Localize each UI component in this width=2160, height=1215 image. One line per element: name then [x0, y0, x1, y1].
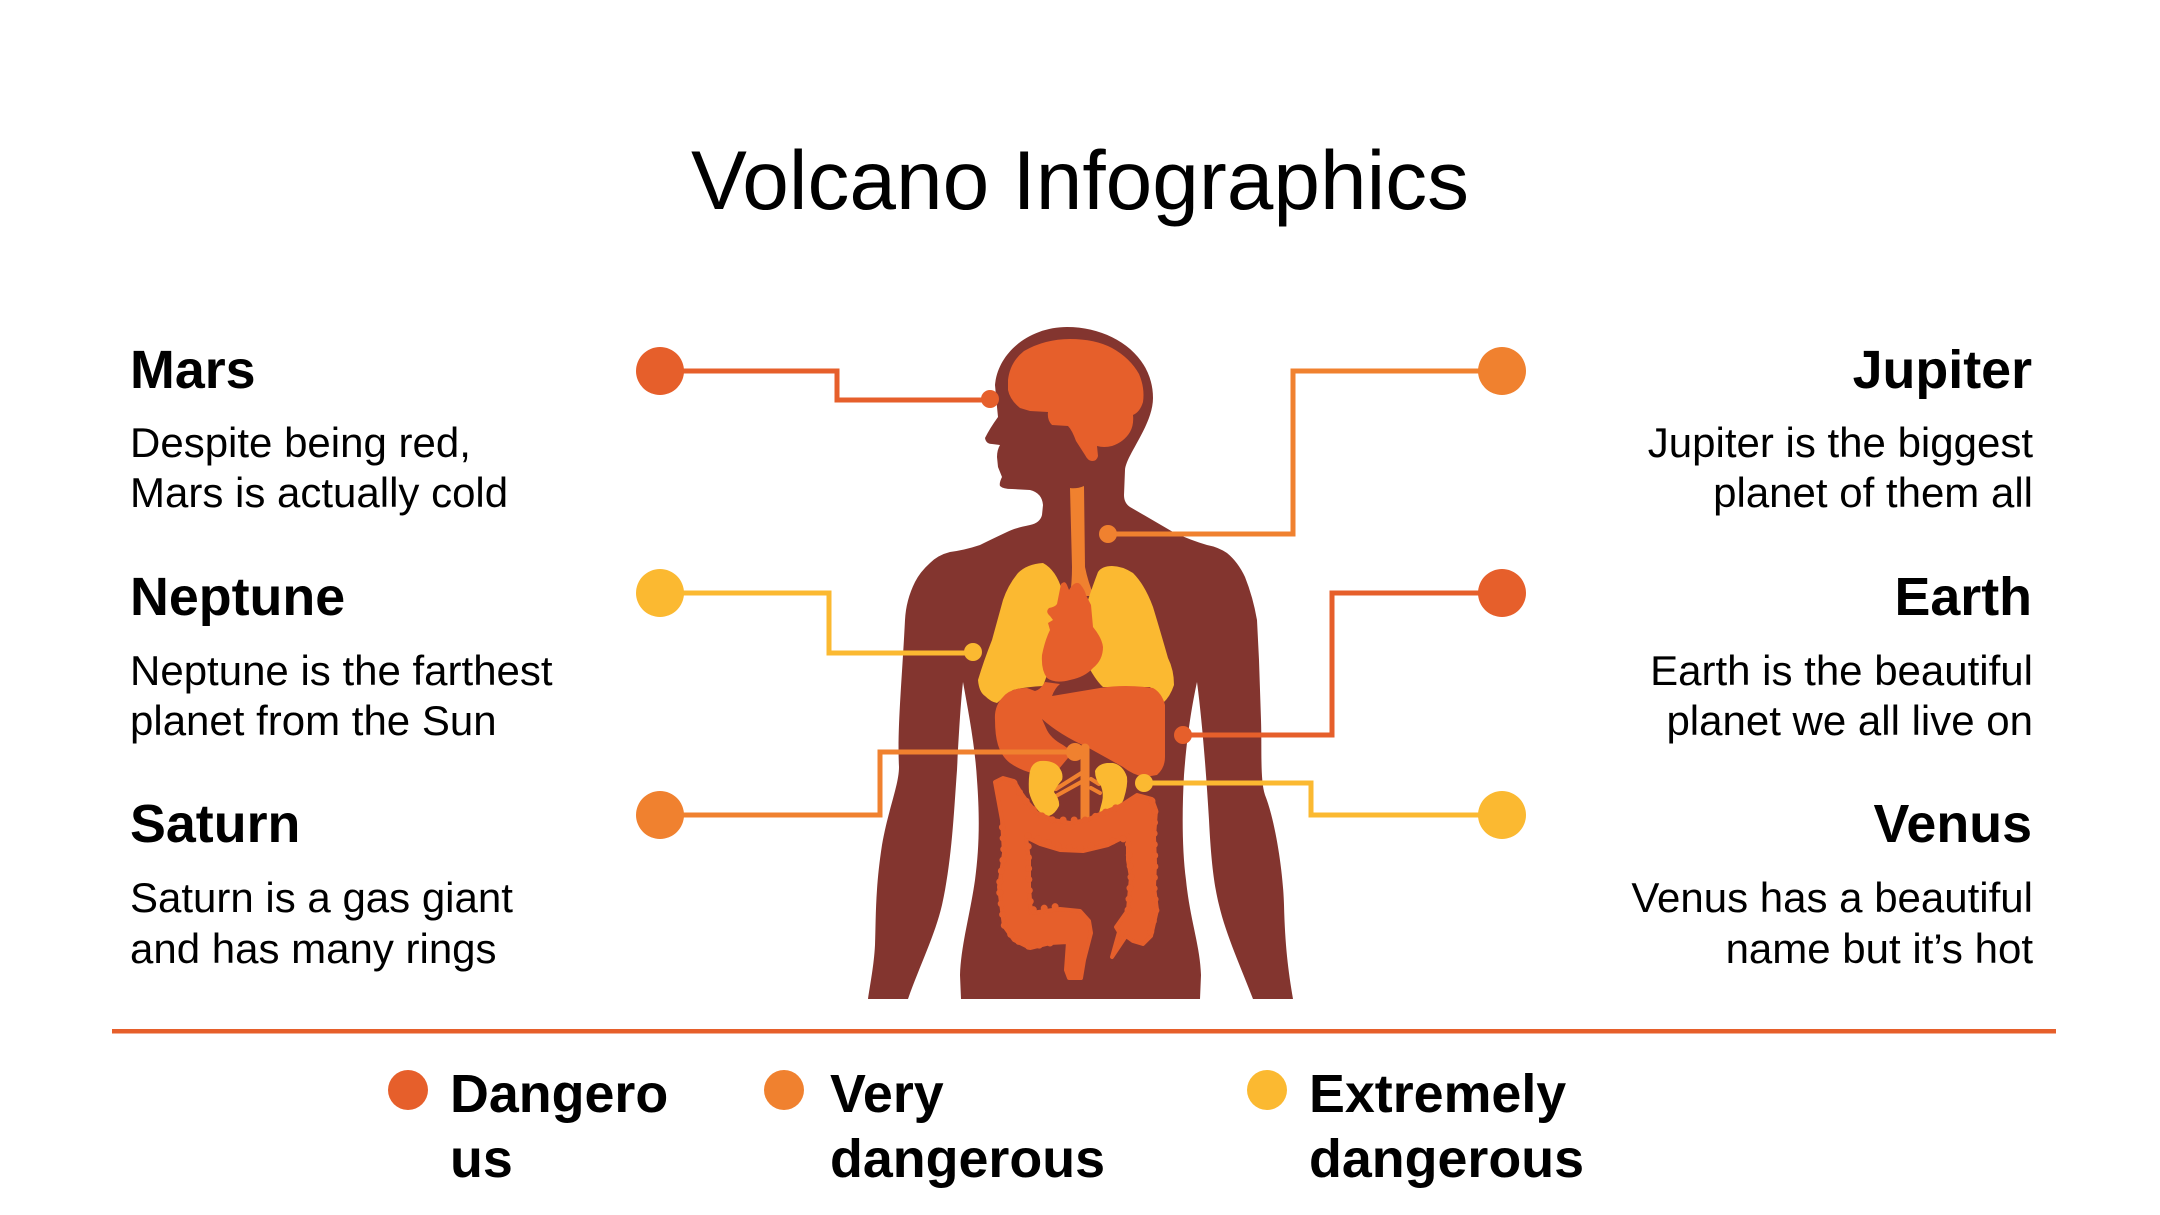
legend: Dangerous	[388, 1064, 668, 1189]
text block: Neptune: Neptune is the farthest	[130, 647, 553, 694]
connector: Jupiter	[1099, 347, 1526, 543]
legend: Very dangerous: Very	[830, 1064, 944, 1124]
organ: left kidney	[1029, 761, 1062, 816]
organ: trachea	[1070, 486, 1094, 596]
text block: Jupiter	[1648, 340, 2033, 516]
text block: Jupiter: planet of them all	[1713, 469, 2033, 516]
title: Volcano Infographics	[691, 133, 1469, 227]
text block: Saturn: and has many rings	[130, 925, 497, 972]
text block: Venus: Venus	[1874, 794, 2032, 854]
text block: Earth: planet we all live on	[1666, 697, 2033, 744]
text block: Jupiter: Jupiter is the biggest	[1648, 419, 2033, 466]
text block: Earth	[1650, 567, 2033, 744]
divider line	[112, 1029, 2056, 1034]
organ: right kidney	[1095, 763, 1127, 813]
connector: Mars	[636, 347, 999, 408]
connector: Venus	[1135, 774, 1526, 839]
text block: Mars: Mars is actually cold	[130, 469, 508, 516]
human body diagram	[868, 327, 1293, 999]
text block: Neptune	[130, 567, 553, 744]
text block: Venus	[1631, 794, 2033, 972]
text block: Earth: Earth is the beautiful	[1650, 647, 2033, 694]
text block: Venus: Venus has a beautiful	[1631, 874, 2033, 921]
connector: Neptune	[636, 569, 982, 661]
legend: Extremely dangerous: dangerous	[1309, 1129, 1584, 1189]
legend: Extremely dangerous	[1247, 1064, 1584, 1189]
connector: Earth	[1174, 569, 1526, 744]
organ: colon	[995, 778, 1157, 978]
text block: Venus: name but it’s hot	[1726, 925, 2033, 972]
legend: Dangerous: us	[450, 1129, 513, 1189]
connector: Saturn	[636, 743, 1084, 839]
organ: heart	[1042, 582, 1103, 682]
text block: Mars: Mars	[130, 340, 256, 400]
text block: Neptune: Neptune	[130, 567, 345, 627]
organ: left lung	[978, 563, 1062, 703]
colon bumps	[999, 783, 1156, 947]
organ: right lung	[1085, 566, 1174, 703]
legend: Extremely dangerous: Extremely	[1309, 1064, 1566, 1124]
text block: Mars: Despite being red,	[130, 419, 471, 466]
text block: Mars	[130, 340, 508, 516]
text block: Jupiter: Jupiter	[1853, 340, 2032, 400]
legend: Very dangerous	[764, 1064, 1105, 1189]
text block: Saturn: Saturn is a gas giant	[130, 874, 513, 921]
organ: brain	[1008, 339, 1144, 461]
text block: Earth: Earth	[1894, 567, 2032, 627]
legend: Very dangerous: dangerous	[830, 1129, 1105, 1189]
text block: Neptune: planet from the Sun	[130, 697, 497, 744]
body silhouette	[868, 327, 1293, 999]
organ: liver and stomach	[995, 682, 1165, 777]
text block: Saturn	[130, 794, 513, 972]
legend: Dangerous: Dangero	[450, 1064, 668, 1124]
vessels: aorta and renal branches	[1056, 748, 1100, 820]
text block: Saturn: Saturn	[130, 794, 300, 854]
